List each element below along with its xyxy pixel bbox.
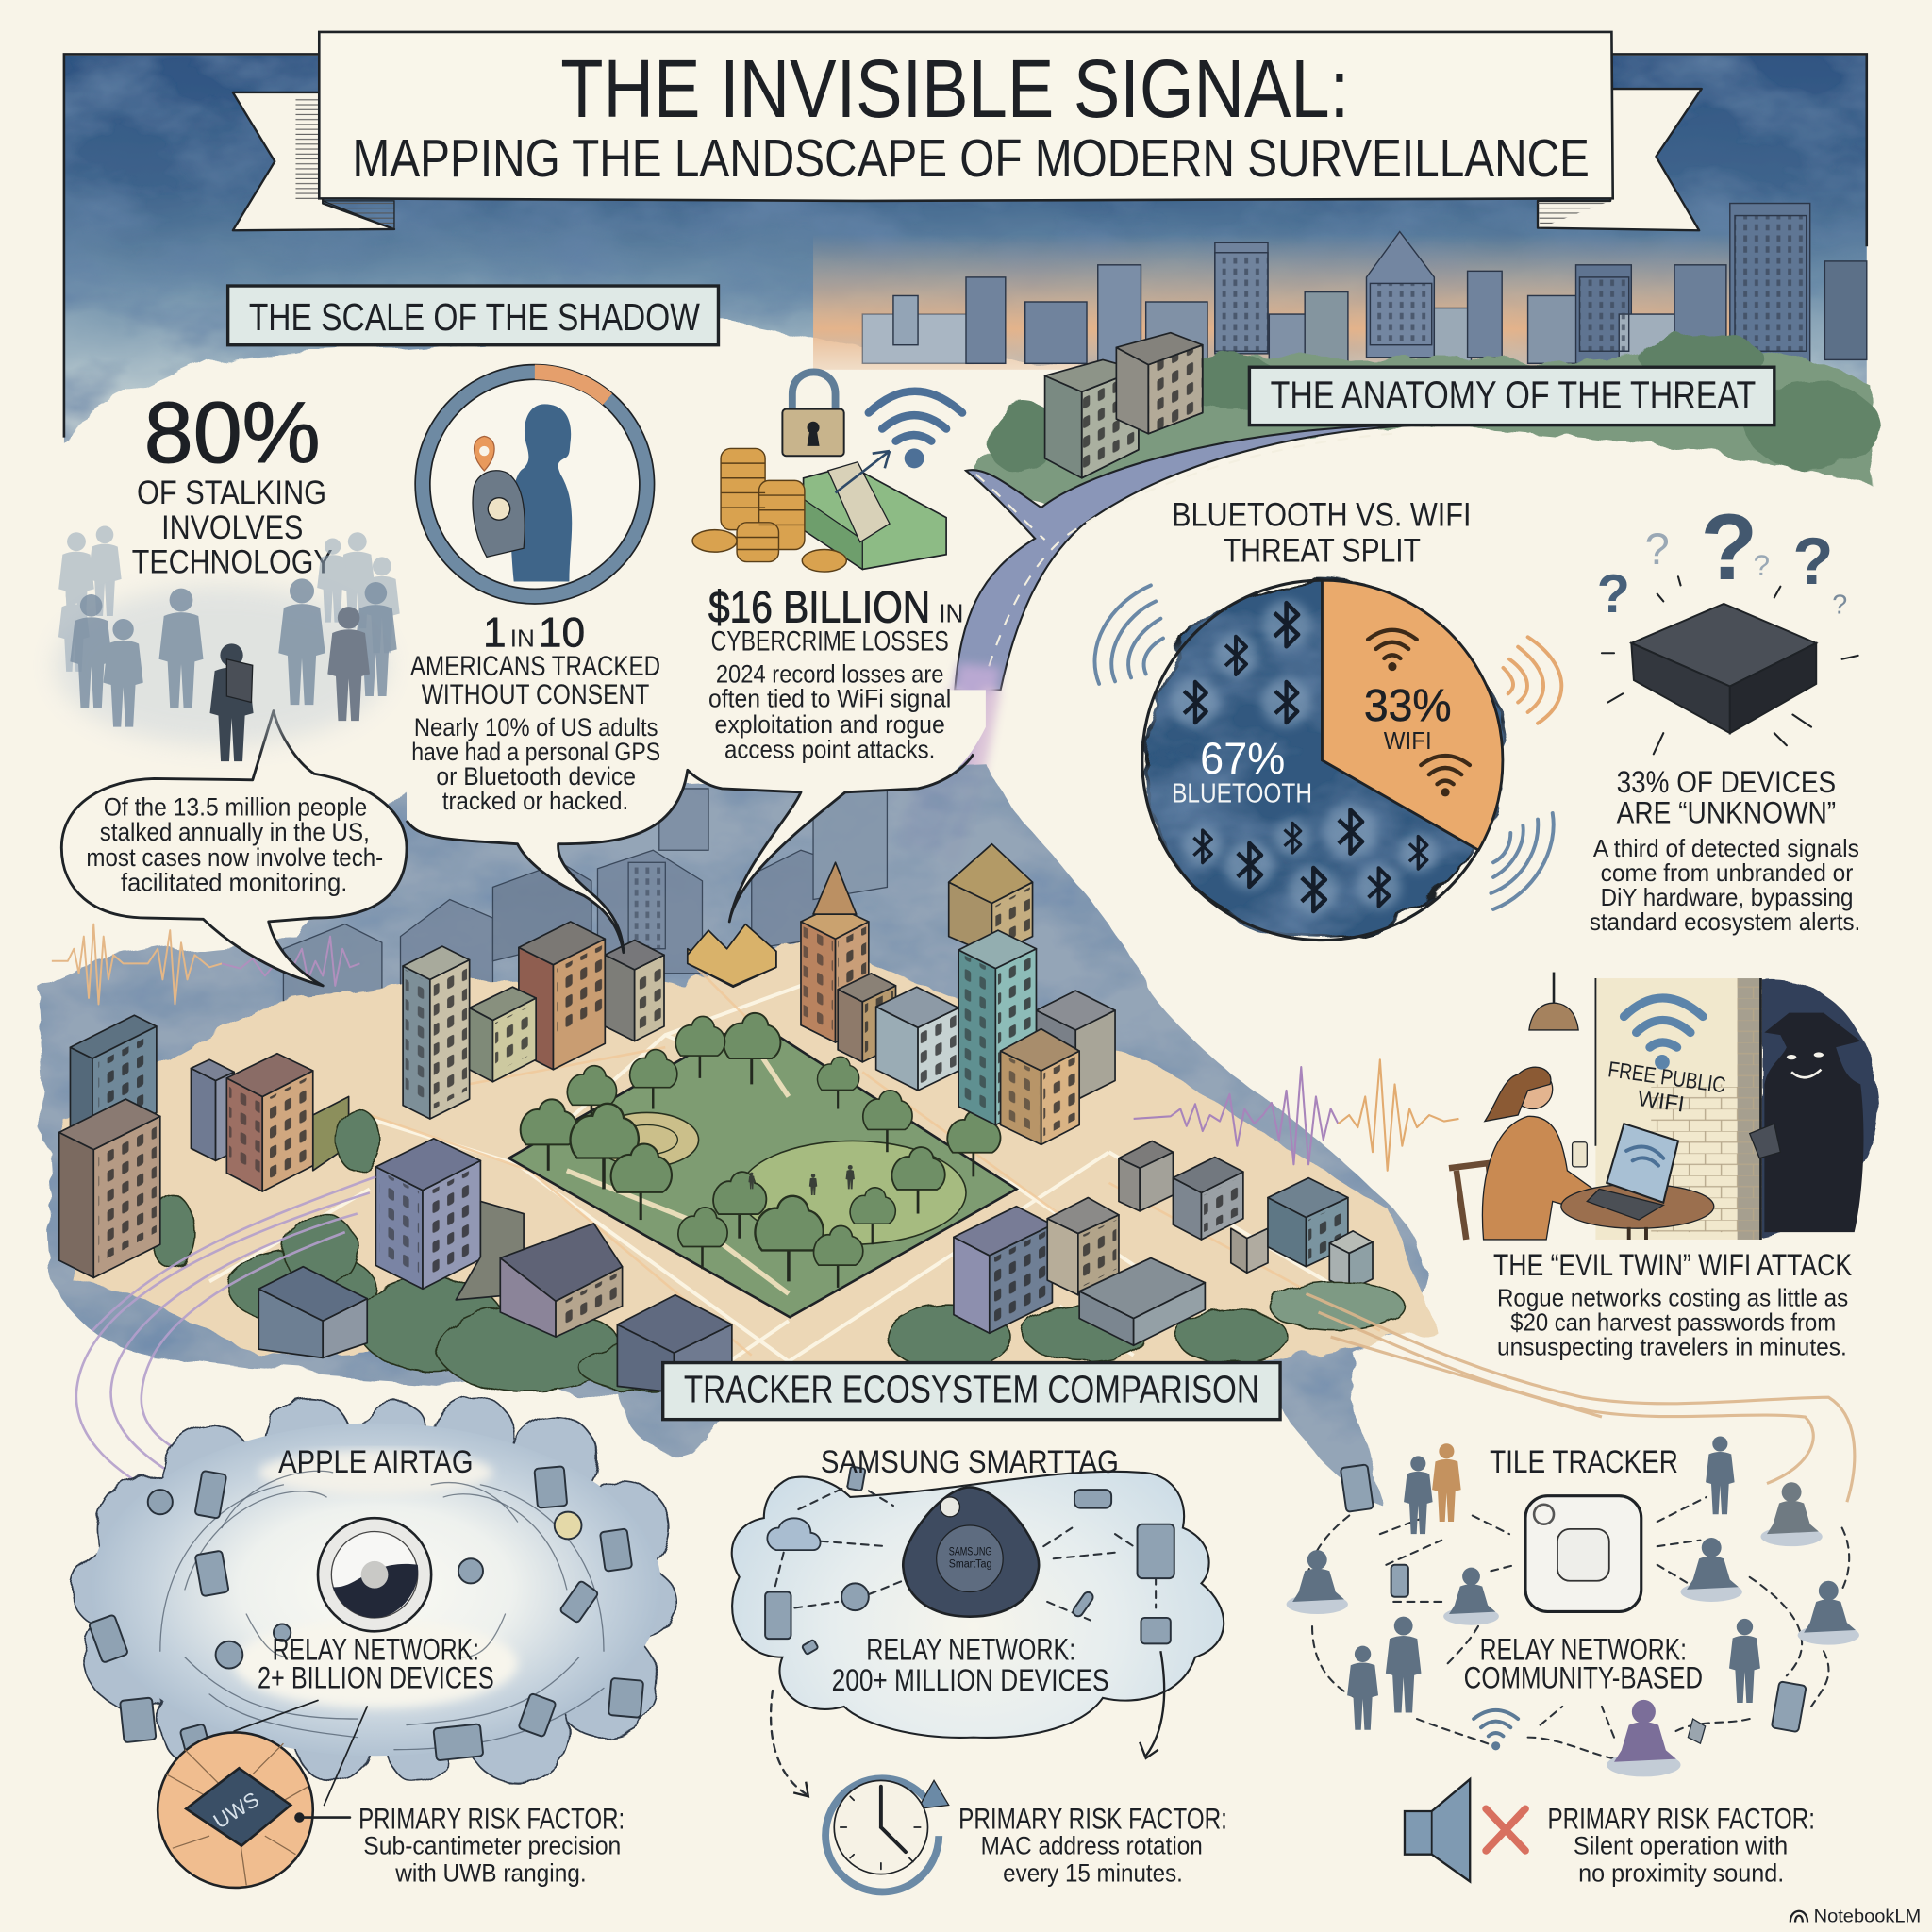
airtag bbox=[318, 1518, 431, 1631]
panel: tracker ecosystem comparison heading: TRACKER ECOSYSTEM COMPARISON bbox=[684, 1367, 1259, 1410]
foreground buildings near road bbox=[1045, 333, 1203, 478]
tracker panel: samsung smarttag cloud bbox=[732, 1444, 1224, 1738]
green hills under skyline bbox=[974, 333, 1879, 511]
stat: 16 billion: access point attacks. bbox=[724, 735, 935, 763]
text block: unknown devices: 33% OF DEVICES bbox=[1617, 764, 1836, 799]
NotebookLM watermark: NotebookLM bbox=[1814, 1907, 1921, 1927]
text block: evil twin wifi attack bbox=[1493, 1247, 1852, 1361]
icon: coins, cash, padlock and wifi bbox=[692, 372, 962, 572]
stat: 1 in 10 bbox=[410, 610, 660, 815]
text block: evil twin wifi attack: $20 can harvest passwords from bbox=[1510, 1308, 1836, 1337]
text block: samsung risk factor: MAC address rotation bbox=[981, 1832, 1203, 1860]
icon: ring with tracked person bbox=[415, 365, 655, 604]
smarttag bbox=[903, 1487, 1039, 1617]
pie chart: threat split: 67% bbox=[1200, 733, 1285, 783]
illustration: crowd of people bbox=[56, 526, 400, 761]
stat: 1 in 10: WITHOUT CONSENT bbox=[422, 679, 649, 710]
text block: unknown devices: DiY hardware, bypassing bbox=[1601, 883, 1853, 911]
sign text bbox=[1603, 1057, 1727, 1122]
text block: unknown devices: standard ecosystem alerts. bbox=[1590, 908, 1860, 936]
text block: evil twin wifi attack: unsuspecting travelers in minutes. bbox=[1497, 1333, 1847, 1361]
panel: scale of the shadow heading: THE SCALE OF THE SHADOW bbox=[249, 295, 701, 339]
road bbox=[955, 425, 1417, 690]
stat: 1 in 10: 1 bbox=[483, 610, 507, 657]
panel: anatomy of the threat heading: THE ANATOMY OF THE THREAT bbox=[1271, 373, 1756, 416]
tracker panel: tile community network: COMMUNITY-BASED bbox=[1464, 1659, 1703, 1694]
network nodes bbox=[765, 1466, 1174, 1655]
illustration: evil twin cafe scene bbox=[1449, 973, 1879, 1240]
dashed community links bbox=[1306, 1497, 1849, 1762]
bubble text: 13.5 million: most cases now involve tech- bbox=[86, 843, 383, 872]
stat: 16 billion: exploitation and rogue bbox=[715, 710, 945, 739]
tracker panel: samsung smarttag cloud: RELAY NETWORK: bbox=[866, 1631, 1075, 1666]
text block: evil twin wifi attack: Rogue networks costing as little as bbox=[1497, 1283, 1848, 1311]
city buildings: front rows bbox=[59, 1099, 1205, 1392]
pie chart: threat split: BLUETOOTH bbox=[1172, 778, 1312, 808]
tracker panel: tile community network: TILE TRACKER bbox=[1490, 1444, 1678, 1480]
stat: 16 billion: 2024 record losses are bbox=[716, 660, 943, 689]
text block: unknown devices: A third of detected signals bbox=[1593, 834, 1859, 862]
tracker panel: tile community network bbox=[1287, 1436, 1859, 1776]
icon: unknown device with question marks: ? bbox=[1700, 495, 1757, 600]
relay devices bbox=[89, 1466, 643, 1771]
text block: samsung risk factor bbox=[958, 1802, 1227, 1887]
smarttag: SAMSUNG bbox=[949, 1545, 991, 1557]
left purple signal streams bbox=[76, 1176, 375, 1485]
stat: 1 in 10: 10 bbox=[539, 610, 585, 657]
stat: 80 percent: OF STALKING bbox=[137, 475, 326, 511]
title banner: THE INVISIBLE SIGNAL: bbox=[560, 42, 1349, 135]
wifi icon bbox=[1474, 1710, 1518, 1750]
icon: clock with rotation arrow bbox=[825, 1778, 949, 1891]
bubble text: 13.5 million: Of the 13.5 million people bbox=[104, 793, 367, 822]
tracker panel: apple airtag cloud: 2+ BILLION DEVICES bbox=[258, 1659, 494, 1694]
stat: 1 in 10: tracked or hacked. bbox=[442, 787, 628, 815]
right orange signal streams bbox=[1306, 1293, 1855, 1502]
stat: 1 in 10: Nearly 10% of US adults bbox=[414, 713, 658, 741]
skyline bbox=[862, 204, 1867, 366]
stat: 1 in 10: or Bluetooth device bbox=[436, 762, 636, 791]
stat: 16 billion: CYBERCRIME LOSSES bbox=[711, 626, 949, 658]
text block: samsung risk factor: PRIMARY RISK FACTOR: bbox=[958, 1802, 1227, 1835]
tracker panel: tile community network: RELAY NETWORK: bbox=[1480, 1631, 1687, 1666]
tile device bbox=[1525, 1496, 1641, 1611]
people in network bbox=[1287, 1436, 1859, 1776]
text block: airtag risk factor bbox=[358, 1802, 625, 1887]
park bbox=[508, 1013, 1017, 1317]
text block: evil twin wifi attack: THE “EVIL TWIN” WIFI ATTACK bbox=[1493, 1247, 1852, 1282]
city buildings: right district bbox=[1119, 1141, 1373, 1291]
text block: airtag risk factor: PRIMARY RISK FACTOR: bbox=[358, 1802, 625, 1835]
sign text: WIFI bbox=[1636, 1086, 1686, 1117]
stat: 80 percent: TECHNOLOGY bbox=[132, 543, 333, 580]
speech bubble shapes: tracked and cybercrime callouts bbox=[407, 690, 986, 953]
icon: unknown device with question marks: ? bbox=[1645, 524, 1670, 574]
text block: airtag risk factor: Sub-cantimeter precision bbox=[363, 1832, 621, 1860]
smarttag: SmartTag bbox=[949, 1557, 991, 1570]
icon: unknown device with question marks: ? bbox=[1597, 564, 1630, 625]
text block: tile risk factor bbox=[1547, 1802, 1815, 1887]
text block: tile risk factor: no proximity sound. bbox=[1578, 1858, 1784, 1887]
wifi on wall bbox=[1624, 998, 1703, 1047]
stat: 16 billion bbox=[708, 582, 963, 763]
bubble text: 13.5 million bbox=[86, 793, 383, 896]
tracker panel: apple airtag cloud: RELAY NETWORK: bbox=[273, 1631, 479, 1666]
bubble text: 13.5 million: stalked annually in the US, bbox=[100, 818, 370, 846]
sky watercolor wash bbox=[64, 55, 1867, 443]
signal waves: center right bbox=[1134, 1059, 1458, 1171]
tree clumps around lower city bbox=[150, 1109, 1405, 1392]
heading: bluetooth vs wifi: BLUETOOTH VS. WIFI bbox=[1172, 497, 1472, 534]
cloud bbox=[732, 1472, 1224, 1738]
city backdrop wash bbox=[37, 764, 1424, 1503]
stat: 80 percent: INVOLVES bbox=[161, 509, 303, 546]
sign text: FREE PUBLIC bbox=[1607, 1057, 1727, 1097]
speech bubble: stalking statistic bbox=[61, 711, 407, 986]
text block: unknown devices: ARE “UNKNOWN” bbox=[1617, 794, 1836, 829]
icon: unknown device with question marks: ? bbox=[1792, 524, 1833, 598]
stat: 80 percent bbox=[132, 385, 333, 580]
stat: 80 percent: 80% bbox=[144, 385, 321, 481]
lamp bbox=[1529, 973, 1578, 1030]
text block: tile risk factor: PRIMARY RISK FACTOR: bbox=[1547, 1802, 1815, 1835]
cloud bbox=[72, 1396, 675, 1783]
stat: 16 billion: $16 BILLION bbox=[708, 582, 930, 632]
icon: silent speaker with red x bbox=[1405, 1779, 1525, 1881]
signal streams from road to city bbox=[820, 665, 991, 899]
tracker panel: apple airtag cloud bbox=[72, 1396, 675, 1783]
city ground and roads bbox=[59, 937, 1436, 1392]
title banner: MAPPING THE LANDSCAPE OF MODERN SURVEILLANCE bbox=[353, 128, 1590, 188]
text block: tile risk factor: Silent operation with bbox=[1574, 1832, 1788, 1860]
signal waves: left bbox=[52, 924, 359, 1004]
chair, table and woman bbox=[1449, 1067, 1714, 1240]
city buildings: back rows bbox=[70, 844, 1115, 1191]
arrows from samsung cloud to clock bbox=[771, 1651, 1164, 1796]
heading: bluetooth vs wifi: THREAT SPLIT bbox=[1224, 533, 1421, 570]
stat: 1 in 10: have had a personal GPS bbox=[411, 738, 660, 766]
heading: bluetooth vs wifi bbox=[1172, 497, 1472, 570]
icon: unknown device with question marks: ? bbox=[1832, 590, 1847, 620]
bluetooth glyphs bbox=[1184, 603, 1427, 911]
text block: unknown devices bbox=[1590, 764, 1860, 936]
panel: tracker ecosystem comparison heading bbox=[663, 1363, 1280, 1420]
shadowy man bbox=[1750, 1013, 1863, 1232]
tracker panel: apple airtag cloud: APPLE AIRTAG bbox=[278, 1444, 474, 1480]
pie chart: threat split bbox=[1142, 580, 1503, 941]
tracker panel: samsung smarttag cloud: 200+ MILLION DEVICES bbox=[832, 1662, 1109, 1697]
text block: samsung risk factor: every 15 minutes. bbox=[1003, 1858, 1183, 1887]
stat: 16 billion: often tied to WiFi signal bbox=[708, 685, 951, 713]
icon: uwb chip callout bbox=[158, 1700, 367, 1888]
panel: scale of the shadow heading bbox=[228, 286, 718, 345]
tracker panel: samsung smarttag cloud: SAMSUNG SMARTTAG bbox=[821, 1444, 1119, 1480]
title banner bbox=[233, 32, 1702, 230]
pie chart: threat split: 33% bbox=[1364, 680, 1452, 731]
stat: 1 in 10: IN bbox=[510, 625, 535, 653]
icon: unknown device with question marks bbox=[1597, 495, 1858, 754]
panel: anatomy of the threat heading bbox=[1249, 367, 1774, 425]
icon: uwb chip callout: UWS bbox=[209, 1788, 263, 1833]
text block: airtag risk factor: with UWB ranging. bbox=[394, 1858, 587, 1887]
icon: unknown device with question marks: ? bbox=[1754, 549, 1770, 582]
stat: 16 billion: IN bbox=[939, 599, 963, 628]
ribbon tails bbox=[233, 89, 1702, 230]
signal arcs around pie bbox=[1094, 585, 1561, 909]
stat: 1 in 10: AMERICANS TRACKED bbox=[410, 651, 660, 682]
faded distant city between speech bubbles bbox=[283, 776, 887, 1035]
pie chart: threat split: WIFI bbox=[1384, 726, 1432, 755]
bubble text: 13.5 million: facilitated monitoring. bbox=[121, 868, 347, 896]
text block: unknown devices: come from unbranded or bbox=[1601, 858, 1854, 887]
